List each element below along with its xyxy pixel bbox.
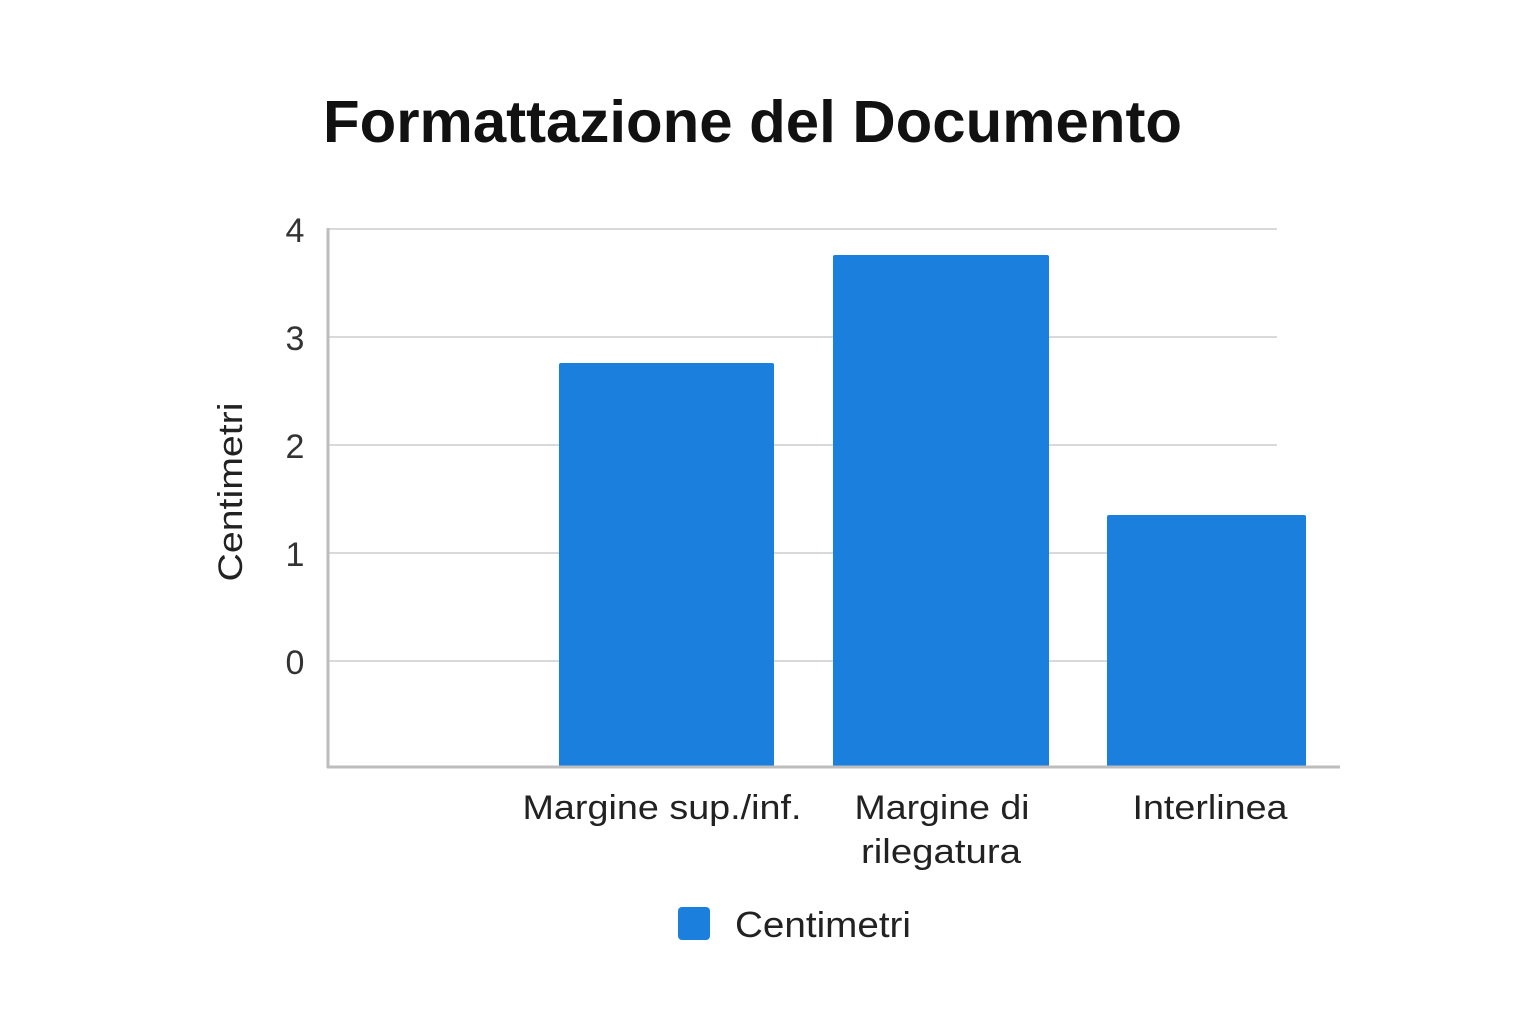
- axes: [327, 228, 1340, 768]
- x axis labels: [522, 789, 1288, 871]
- x axis labels: Margine sup./inf.: [522, 789, 802, 827]
- bar chart: [212, 212, 1340, 871]
- bar: Margine sup./inf.: [559, 363, 774, 767]
- y axis tick labels: 0: [286, 644, 304, 682]
- y axis tick labels: 1: [286, 536, 304, 574]
- x axis labels: rilegatura: [861, 833, 1021, 871]
- bar: Interlinea: [1107, 515, 1306, 767]
- bar: Margine di rilegatura: [833, 255, 1049, 767]
- y axis tick labels: 3: [286, 320, 304, 358]
- legend: Centimetri: [735, 904, 911, 945]
- title: Formattazione del Documento: [323, 89, 1182, 155]
- y axis tick labels: 2: [286, 428, 304, 466]
- x axis labels: Interlinea: [1132, 789, 1288, 827]
- x axis labels: Margine di: [854, 789, 1030, 827]
- y axis tick labels: 4: [286, 212, 304, 250]
- y axis tick labels: [286, 212, 304, 682]
- y axis title: Centimetri: [212, 402, 250, 582]
